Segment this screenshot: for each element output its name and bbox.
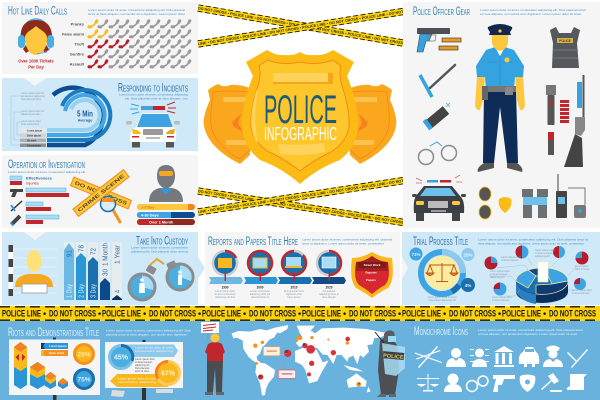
shield chart — [351, 252, 393, 298]
row: pranks: Pranks — [71, 22, 85, 26]
text: gear description: Lorem ipsum dolor sit amet, consectetur adipiscing elit. Duis placerat tortor — [480, 8, 586, 12]
text: reports description — [302, 237, 392, 245]
badge: left — [204, 84, 250, 164]
timeline 2000: placerat tortor sit — [251, 296, 269, 299]
chart: custody duration columns: 1 Year — [114, 244, 122, 264]
panel: responding to incidents — [2, 78, 198, 151]
value 71: 71% — [411, 252, 421, 257]
tape: lower left to right: DO NOT CROSS • POLICE LINE • DO NOT CROSS • POLICE LINE • DO NOT CROSS • POLICE LINE • DO NOT CROSS — [198, 189, 404, 225]
chart: custody duration columns: 2 Day — [78, 284, 86, 298]
value 25: 25% — [463, 252, 473, 258]
text: trial description — [478, 237, 588, 245]
text: reports description: Lorem ipsum dolor sit amet, consectetur adipiscing elit. placerat — [302, 237, 392, 241]
timeline 2010: dignissim dolor — [286, 293, 302, 296]
row: assault — [70, 61, 190, 67]
text: gear description — [480, 8, 586, 16]
icon: scales — [417, 374, 439, 392]
legend: Effectiveness — [26, 176, 53, 180]
heading: monochrome: Monochrome Icons — [414, 326, 468, 338]
chart: custody duration columns: 1 Month — [102, 243, 110, 266]
text: responding description — [119, 92, 188, 100]
time bars: 4-30 Days — [141, 213, 159, 217]
chart: isometric towers — [14, 342, 68, 389]
text: scales caption: Lorem ipsum dolor sit amet — [428, 296, 457, 299]
timeline 1990: adipiscing elit duis — [215, 296, 236, 299]
callout: map note 1 — [263, 347, 287, 356]
icon: taser — [424, 103, 450, 129]
billboard: arrows and percentages: Lorem ipsum dolor — [135, 358, 155, 361]
legend flags: Dolor Amet — [49, 351, 64, 355]
billboard: arrows and percentages: tortor at risus — [135, 370, 150, 373]
timeline 1990 — [209, 251, 243, 299]
row: pranks — [71, 21, 190, 27]
text: scales caption — [428, 296, 457, 302]
main police line tape: • — [443, 308, 446, 318]
shield chart: Street Work — [364, 263, 381, 267]
text: riots description: Lorem ipsum dolor sit amet, consectetur adipiscing elit. Duis — [106, 328, 192, 332]
label: over 1000 tickets: Over 1000 Tickets — [18, 58, 54, 64]
heading: hot line: Hot Line Daily Calls — [8, 6, 67, 18]
pies with captions: sit amet consect — [572, 292, 590, 295]
icon: binoculars — [522, 189, 548, 218]
timeline 2010: lorem ipsum — [287, 296, 301, 299]
heading: gear: Police Officer Gear — [413, 6, 470, 18]
chart: scales ring — [410, 248, 475, 302]
icon: pepper spray — [548, 132, 554, 155]
timeline 2000: adipiscing dolor elit — [250, 293, 270, 296]
badge: main: POLICE — [264, 88, 337, 132]
graphic: crime scene tape and magnifier: DO NOT CROSS — [74, 180, 129, 207]
shield chart: Reports — [365, 270, 377, 274]
row: gunfire: Gunfire — [70, 52, 85, 56]
badge: right — [350, 84, 396, 164]
figure: police officer — [475, 24, 525, 172]
main police line tape: DO NOT CROSS — [349, 308, 396, 318]
row: theft: Theft — [74, 42, 85, 46]
pies with captions: sit amet consect — [490, 273, 508, 276]
panel: operation or investigation — [2, 155, 198, 228]
chart: custody duration columns: 91 — [66, 250, 74, 257]
panel: trial process — [402, 232, 600, 305]
shield chart: Papers — [366, 278, 376, 282]
pies with captions: dolor sit amet — [575, 268, 590, 271]
billboard: arrows and percentages: Lorem ipsum dolor sit amet — [118, 376, 156, 380]
icon: shotgun — [564, 75, 585, 167]
graphic: crime scene tape and magnifier: CRIME SCENE — [77, 173, 127, 214]
timeline 2010: Duis placerat tortor — [284, 290, 304, 293]
timeline 2010 — [278, 251, 312, 299]
chart: response time rings — [47, 88, 110, 145]
figure: riot police — [375, 330, 405, 397]
icon: badge — [520, 374, 535, 392]
chart: custody duration columns — [64, 242, 122, 300]
label: 5 min average: 5 Min — [77, 110, 93, 118]
text: custody description: Lorem ipsum dolor sit amet, consectetur — [131, 246, 188, 250]
panel: police officer gear — [403, 2, 600, 228]
billboard: arrows and percentages: Duis placerat — [135, 367, 149, 370]
timeline 2000 — [244, 251, 278, 299]
pies with captions: sit amet consect — [535, 252, 553, 255]
main police line tape: • — [43, 308, 46, 318]
timeline 1990: sit amet consectetur — [214, 293, 236, 296]
chart: custody duration columns: 72 — [90, 248, 98, 255]
icon: officer bust — [446, 348, 466, 367]
icon: police car front — [126, 102, 180, 148]
chart labels with brackets: Dolor ipsum — [27, 134, 41, 137]
legend flags — [41, 343, 68, 356]
main police line tape: • — [143, 308, 146, 318]
figure: protester — [201, 322, 225, 395]
chart: custody duration columns: 30 — [102, 269, 110, 276]
donut: 75 percent: 75% — [77, 376, 91, 384]
tape: top right to left: LINE • DO NOT CROSS • POLICE LINE • DO NOT CROSS • POLICE LINE • DO NOT CROSS • POLICE LINE • DO NOT — [198, 10, 405, 46]
icon: handcuffs — [129, 259, 193, 300]
small signs — [111, 389, 173, 397]
label: over 1000 tickets: Per Day — [28, 64, 44, 70]
heading: riots: Riots and Demonstrations Title — [8, 327, 99, 339]
chart labels with brackets: Lorem ipsum — [27, 129, 42, 132]
chart labels with brackets: consectetur adipiscing — [21, 95, 45, 98]
graphic: police badges — [204, 50, 396, 184]
pies with captions: Lorem ipsum dolor — [572, 289, 592, 292]
map: world with incident markers — [232, 325, 388, 396]
text: monochrome description — [478, 328, 583, 336]
text: hot line description: tortor at risus aliquam, non iaculis arcu dignissim. Lorem ipsum dolor — [88, 12, 185, 16]
main police line tape: • — [543, 308, 546, 318]
icon: car — [519, 347, 539, 367]
timeline 2020 — [312, 251, 346, 299]
timeline 2020: risus aliquam — [322, 296, 336, 299]
main police line tape: POLICE LINE — [2, 308, 41, 318]
billboard: arrows and percentages: adipiscing elit — [135, 364, 150, 367]
main police line tape: • — [198, 308, 201, 318]
value 4: 4% — [465, 283, 471, 288]
text: custody description: adipiscing elit. Duis placerat tortor at risus — [131, 250, 189, 254]
text: gear description: at risus aliquam, non iaculis arcu dignissim. Lorem ipsum dolor sit amet, — [480, 12, 582, 16]
icon: handcuffs gear — [418, 142, 456, 164]
row: theft — [74, 41, 190, 47]
icon: handgun and magazines — [417, 28, 461, 52]
billboard: arrows and percentages: Lorem ipsum dolor sit amet — [135, 346, 173, 350]
heading: reports: Reports and Papers Title Here — [208, 236, 298, 248]
donut: 45 percent: 45% — [114, 354, 129, 362]
panel: hot line daily calls — [2, 2, 198, 74]
tape: top left to right: DO NOT CROSS • POLICE LINE • DO NOT CROSS • POLICE LINE • DO NOT CROSS • POLICE LINE • DO NOT CROSS — [198, 6, 404, 45]
panel: central tapes top — [197, 4, 406, 48]
panel: central tapes bottom — [197, 177, 406, 226]
panel: monochrome icons — [414, 326, 588, 392]
text: trial description: risus aliquam, non iaculis arcu dignissim. Lorem ipsum dolor sit amet, consectetur — [478, 241, 584, 245]
row: false alarm — [62, 31, 190, 37]
time bars: 1-3 Day — [141, 205, 155, 209]
main police line tape: POLICE LINE — [102, 308, 141, 318]
figure: riot police: POLICE — [383, 353, 404, 361]
callout: map note 2 — [278, 358, 296, 378]
chart labels with brackets: Consectetur — [27, 144, 41, 147]
graphic: mugshot — [8, 245, 57, 296]
time bars: Over 1 Month — [149, 221, 174, 225]
time bars — [137, 204, 195, 225]
pies with captions: sit amet consect — [501, 259, 519, 262]
main police line tape: • — [498, 308, 501, 318]
panel: reports and papers — [205, 232, 400, 305]
main police line tape: • — [243, 308, 246, 318]
pies with captions — [484, 246, 592, 302]
text: trial description: Lorem ipsum dolor sit amet, consectetur adipiscing elit. Duis placerat tortor at — [478, 237, 588, 241]
chart: custody duration columns: 1 Day — [66, 284, 74, 298]
chart labels with brackets: amet consectetur — [21, 123, 40, 126]
legend flags: Lorem Ipsum — [49, 344, 67, 348]
main police line tape: DO NOT CROSS — [249, 308, 296, 318]
timeline 2000: Lorem consectetur — [250, 290, 270, 293]
icon: cop bust — [543, 346, 563, 367]
chart labels with brackets: Sit amet — [27, 139, 37, 142]
main police line tape: POLICE LINE — [302, 308, 341, 318]
chart: custody duration columns: 78 — [78, 245, 86, 252]
chart labels with brackets: Lorem ipsum dolor sit — [21, 110, 44, 113]
icon: police car gear — [412, 175, 466, 221]
text: hot line description: Lorem ipsum dolor sit amet, consectetur adipiscing elit. Duis placerat — [88, 8, 185, 12]
text: responding description: elit. Duis placerat tortor at risus aliquam, non — [125, 96, 188, 100]
heading: responding: Responding to Incidents — [118, 82, 188, 94]
bars: firearm — [10, 188, 69, 197]
panel: riots and demonstrations — [8, 327, 192, 400]
legend: Injuries — [26, 180, 39, 186]
icon: bulletproof vest — [550, 27, 580, 68]
text: custody description — [131, 246, 189, 254]
main police line tape: DO NOT CROSS — [49, 308, 96, 318]
billboard: arrows and percentages: consectetur adipiscing — [135, 349, 173, 353]
icon: scroll — [567, 374, 587, 390]
timeline 2020: adipiscing tortor at — [319, 293, 339, 296]
main police line tape: • — [298, 308, 301, 318]
chart: 3d ring — [516, 262, 568, 304]
main police line tape: DO NOT CROSS — [149, 308, 196, 318]
heading: operation: Operation or Investigation — [8, 159, 85, 171]
pies with captions: Lorem ipsum — [575, 265, 589, 268]
label: over 1000 tickets — [18, 58, 54, 70]
chart: custody duration columns: 3 Day — [90, 284, 98, 298]
chart labels with brackets: Lorem ipsum dolor — [21, 120, 41, 123]
bars: taser — [10, 215, 59, 226]
chart labels with brackets: Duis placerat tortor — [21, 98, 41, 101]
pies with captions: Lorem ipsum dolor — [501, 256, 521, 259]
timeline 2010: 2010 — [290, 286, 298, 290]
panel: bottom blue band — [0, 320, 600, 400]
chart labels with brackets: Lorem ipsum dolor sit — [21, 92, 44, 95]
icon: baton — [420, 65, 455, 97]
timeline 2020: Consectetur — [323, 290, 336, 293]
icon: baton — [567, 349, 588, 368]
graphic: crime scene tape and magnifier — [71, 170, 131, 222]
icon: bulletproof vest: POLICE — [559, 39, 571, 43]
label: 5 min average: Average — [78, 118, 92, 122]
donut: 67 percent: 67% — [161, 370, 176, 378]
pies with captions: adipiscing elit — [535, 255, 550, 258]
billboard: arrows and percentages: sit amet consect — [135, 361, 153, 364]
label: 5 min average — [77, 110, 93, 122]
badge: main — [242, 50, 358, 184]
main police line tape: • — [398, 308, 401, 318]
row: assault: Assault — [70, 62, 85, 66]
subtitle: infographic: INFOGRAPHIC — [264, 124, 337, 144]
icon: woman bust — [444, 374, 462, 392]
icon: shells — [560, 100, 569, 123]
icon: gavel — [541, 373, 562, 392]
main police line tape: POLICE LINE — [202, 308, 241, 318]
timeline 2020: 2020 — [325, 286, 333, 290]
icon: gun — [493, 375, 515, 392]
text: reports description: tortor at dignissim. Lorem ipsum dolor sit amet, consectetur — [302, 241, 384, 245]
chart labels with brackets: adipiscing elit duis — [21, 113, 41, 116]
pies with captions: Lorem ipsum dolor — [490, 270, 510, 273]
legend — [10, 176, 53, 186]
icon: cuffs — [466, 376, 488, 392]
icon: mugshot — [470, 348, 489, 367]
text: riots description: placerat tortor at risus aliquam, non iaculis arcu dignissim. — [106, 332, 188, 336]
panel: take into custody — [2, 232, 205, 305]
text: operation description: Lorem ipsum dolor sit amet, consectetur adipiscing elit. — [8, 170, 86, 174]
timeline 2000: 2000 — [256, 286, 264, 290]
main police line tape: POLICE LINE — [502, 308, 541, 318]
chart: custody duration columns: 4 — [114, 290, 122, 293]
text: hot line description — [88, 8, 185, 16]
text: monochrome description: Lorem ipsum dolor sit amet, consectetur adipiscing elit. Duis placerat tortor — [478, 328, 583, 332]
text: monochrome description: at risus aliquam, non iaculis arcu dignissim. Lorem ipsum dolor sit amet, — [478, 332, 578, 336]
main police line tape: • — [98, 308, 101, 318]
timeline 1990: 1990 — [221, 286, 229, 290]
pies with captions: adipiscing elit — [490, 276, 505, 279]
billboard: arrows and percentages — [105, 340, 183, 400]
text: riots description — [106, 328, 192, 336]
icon: masked suspect — [149, 165, 183, 202]
heading: trial: Trial Process Title — [413, 236, 468, 248]
icon: sunglasses — [479, 187, 491, 219]
billboard: arrows and percentages: consectetur adipiscing — [118, 380, 156, 384]
row: gunfire — [70, 51, 190, 57]
tape: lower right to left: LINE • DO NOT CROSS • POLICE LINE • DO NOT CROSS • POLICE LINE • DO NOT CROSS • POLICE LINE • DO NOT — [198, 179, 405, 214]
icon: scales — [426, 263, 458, 282]
main police line tape: POLICE LINE — [402, 308, 441, 318]
billboard: towers and percentages — [9, 338, 100, 400]
row: false alarm: False alarm — [62, 32, 84, 36]
icon: crossed tape — [414, 346, 442, 368]
icon: courthouse — [494, 346, 514, 367]
icon: radio — [556, 174, 586, 218]
main police line tape: • — [343, 308, 346, 318]
text: scales caption: consectetur adipiscing elit — [428, 299, 456, 302]
pies with captions: Lorem ipsum dolor — [492, 296, 512, 299]
timeline 1990: Lorem ipsum dolor — [215, 290, 235, 293]
bars: baton — [11, 201, 51, 211]
heading: custody: Take Into Custody — [136, 236, 188, 248]
donut: 25 percent: 25% — [77, 352, 91, 358]
main police line tape: DO NOT CROSS — [449, 308, 496, 318]
icon: operator with headset — [18, 19, 54, 55]
pies with captions: sit amet consect — [492, 299, 510, 302]
icon: flashlight — [546, 85, 556, 125]
pies with captions: Lorem ipsum dolor — [535, 249, 555, 252]
text: responding description: Lorem ipsum dolor sit amet, consectetur adipiscing — [119, 92, 188, 96]
icon: small badge — [499, 197, 511, 213]
main police line tape — [0, 306, 600, 321]
chart labels with brackets — [11, 92, 46, 147]
